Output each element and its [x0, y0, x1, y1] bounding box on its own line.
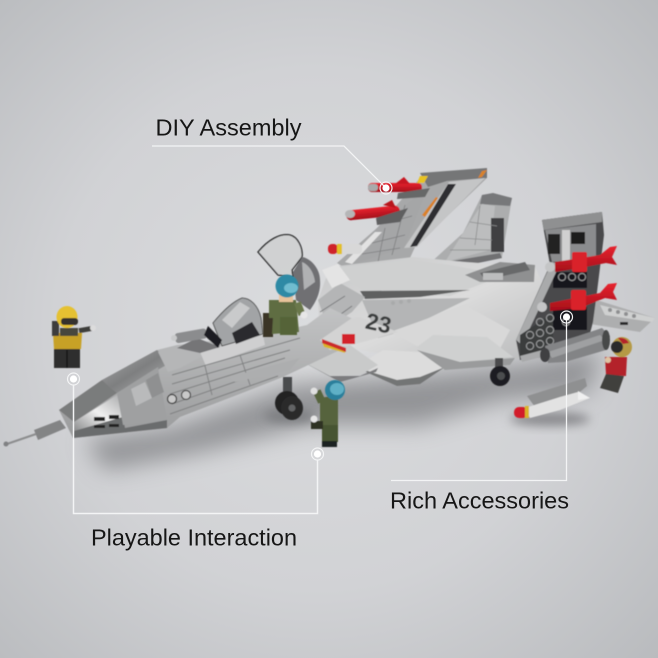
ground shadow — [85, 350, 600, 470]
missile lower — [345, 200, 408, 225]
rear fin — [428, 193, 512, 271]
red crew minifigure — [600, 337, 632, 393]
upper rack missile — [545, 246, 617, 272]
folded wing with red missiles — [328, 168, 487, 268]
spine bricks behind cockpit — [318, 264, 365, 328]
cockpit canopy open — [258, 235, 320, 310]
right wing tip — [583, 297, 655, 332]
lower flaps — [290, 335, 515, 386]
side strake — [230, 358, 300, 382]
missile upper — [368, 177, 430, 199]
callout: DIY Assembly — [152, 114, 392, 194]
callout: Playable Interaction — [68, 373, 324, 550]
drop tank — [540, 328, 610, 363]
green crew minifigure — [310, 380, 345, 447]
yellow crew minifigure — [52, 306, 96, 368]
dark wing with red missiles — [516, 212, 617, 362]
bomb accessory — [514, 378, 590, 418]
cockpit front canopy — [171, 298, 263, 353]
lower rack missile — [537, 283, 617, 312]
callout: Playable Interaction: Playable Interaction — [91, 524, 297, 550]
nose probe — [4, 420, 66, 446]
callout: Rich Accessories — [390, 311, 572, 514]
number 23 panel — [320, 308, 398, 353]
aircraft model — [4, 168, 655, 446]
fuselage panel lines — [170, 338, 300, 414]
callout: DIY Assembly: DIY Assembly — [156, 114, 302, 140]
insignia roundels — [168, 394, 176, 404]
front landing gear — [275, 377, 303, 420]
main wing surface — [318, 257, 550, 362]
number 23 panel: 23 — [363, 308, 394, 339]
callout: Rich Accessories: Rich Accessories — [390, 488, 569, 514]
rear landing wheel — [490, 358, 510, 386]
fuselage — [59, 308, 372, 438]
pilot minifigure — [263, 274, 308, 337]
missile red tip — [328, 244, 362, 254]
